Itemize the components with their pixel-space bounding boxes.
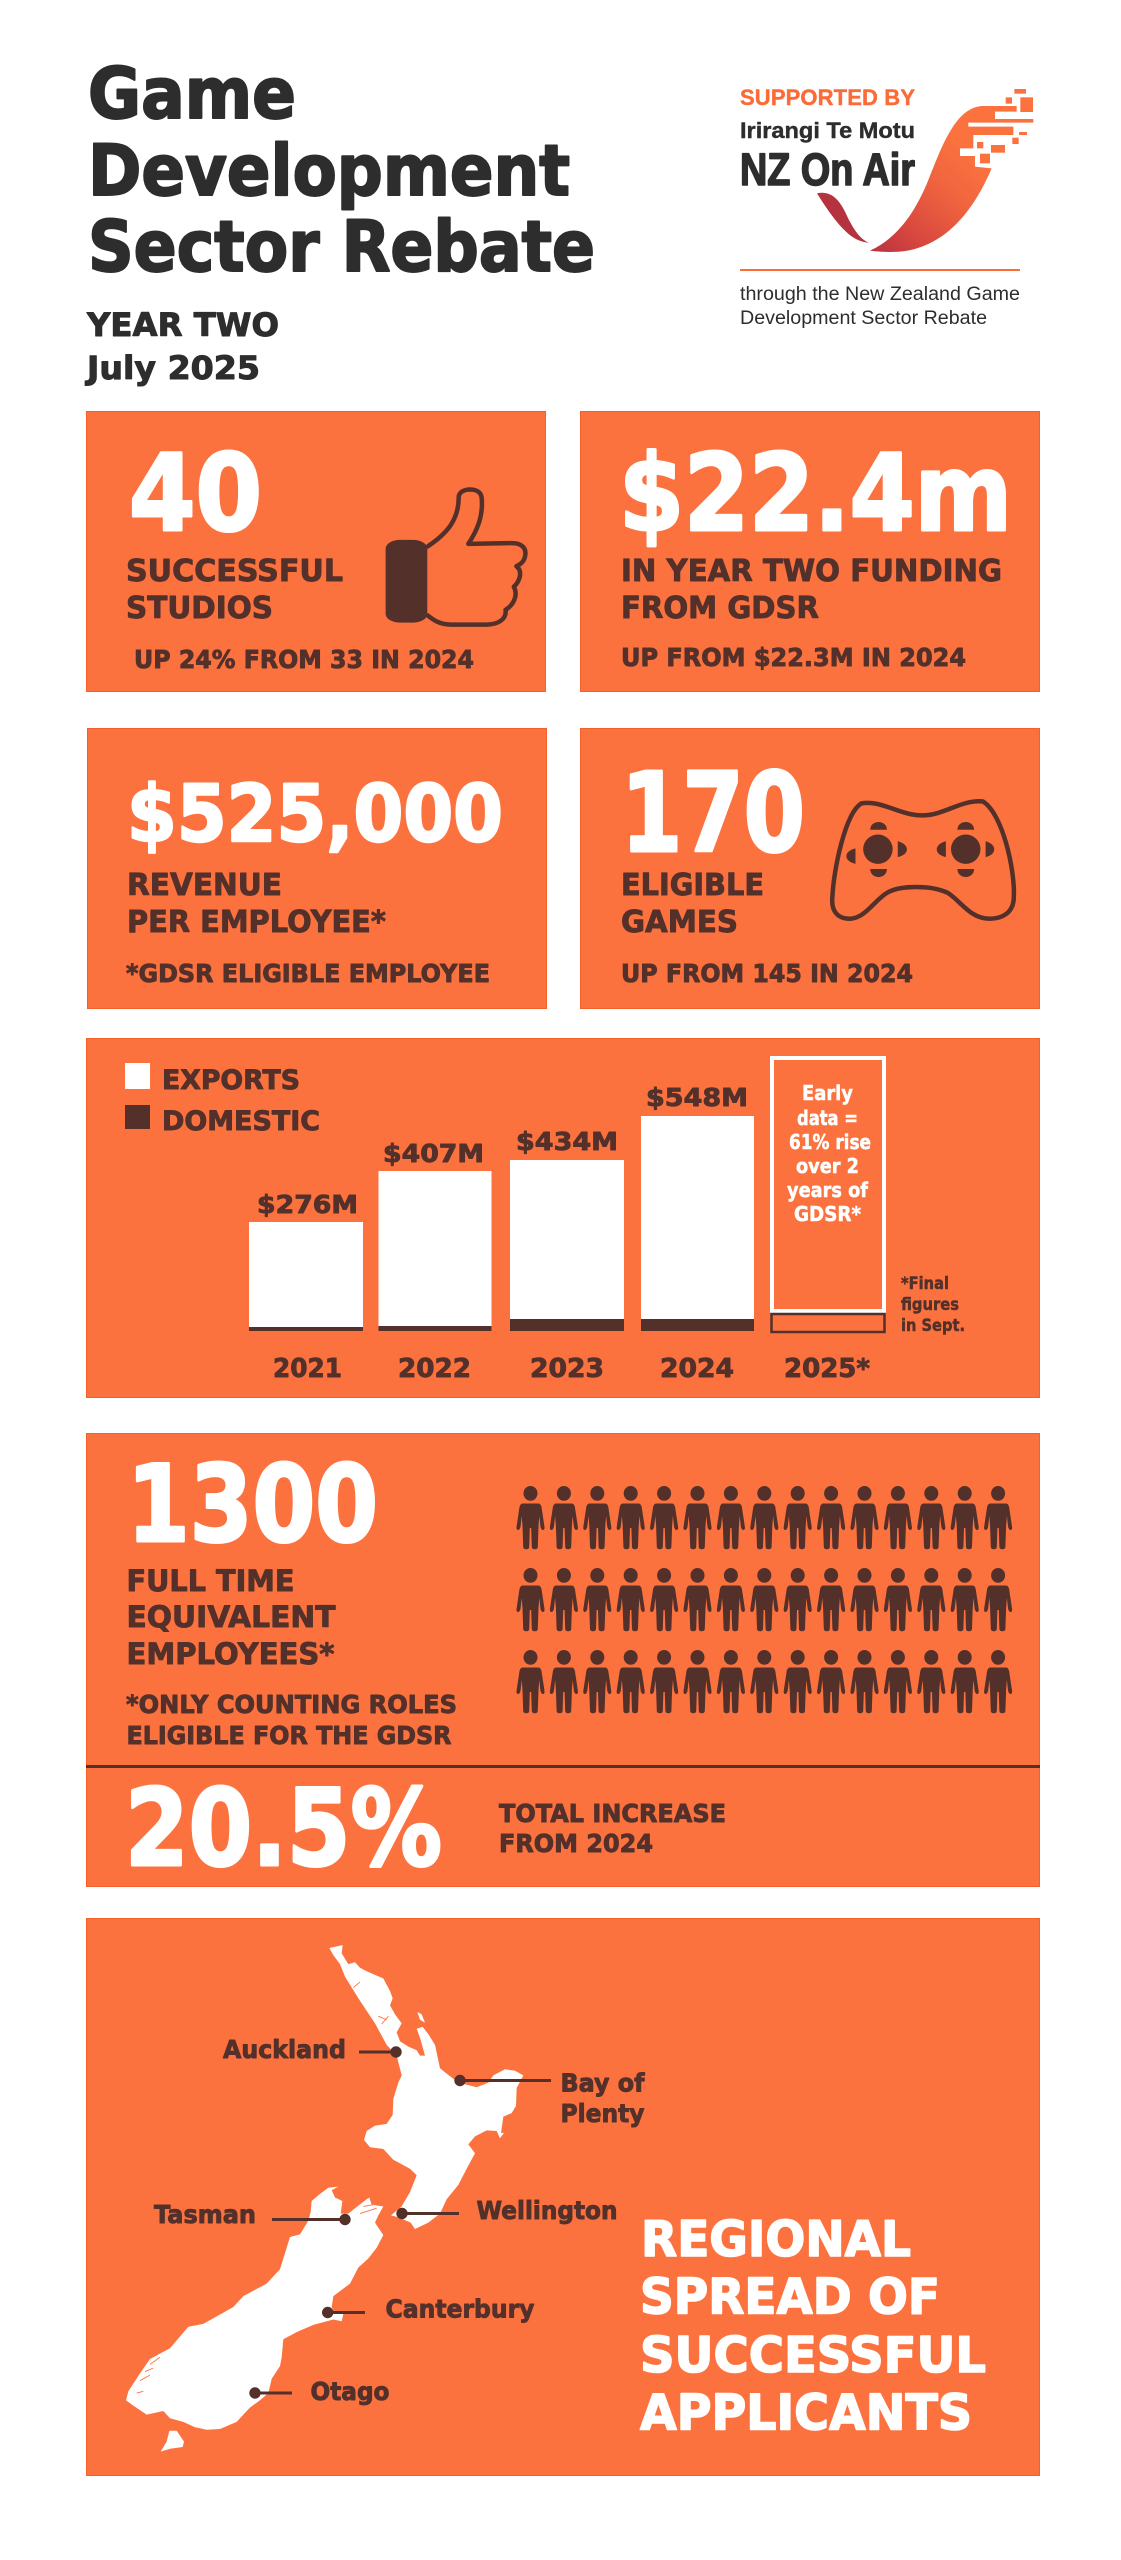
legend: EXPORTS <box>162 1065 300 1096</box>
note: only counting eligible roles: ELIGIBLE FOR THE GDSR <box>126 1721 452 1750</box>
note: up from 145: UP FROM 145 IN 2024 <box>621 959 913 988</box>
map marker: Wellington <box>396 2196 618 2225</box>
heading: regional spread of successful applicants: SUCCESSFUL <box>640 2327 986 2384</box>
map marker: Bay of Plenty <box>454 2068 646 2128</box>
note: up 24%: UP 24% FROM 33 IN 2024 <box>134 645 474 674</box>
axis years <box>273 1354 870 1384</box>
panel: employees <box>86 1434 1040 1890</box>
stat: 40: 40 <box>129 432 262 555</box>
footnote: final figures: figures <box>901 1295 959 1315</box>
stat: $525,000: $525,000 <box>127 770 503 860</box>
bar 2022 <box>378 1139 492 1331</box>
axis years: 2023 <box>530 1354 604 1384</box>
map marker: Canterbury: Canterbury <box>386 2294 534 2324</box>
stat: 1300: 1300 <box>127 1443 378 1566</box>
heading: regional spread of successful applicants: REGIONAL <box>641 2211 911 2268</box>
label: revenue per employee: REVENUE <box>127 868 282 903</box>
map marker: Bay of Plenty: Plenty <box>560 2099 644 2128</box>
NZ On Air wordmark: NZ On Air <box>740 144 915 195</box>
label: full time equivalent employees: EQUIVALENT <box>126 1600 336 1634</box>
heading: regional spread of successful applicants: APPLICANTS <box>640 2384 972 2442</box>
map marker: Tasman <box>154 2200 351 2229</box>
panel: revenue bar chart <box>86 1038 1040 1398</box>
bar 2022: $407M <box>383 1139 484 1168</box>
note: up from $22.3m: UP FROM $22.3M IN 2024 <box>621 643 966 672</box>
early data note: years of <box>787 1178 868 1202</box>
map marker: Otago <box>249 2377 390 2406</box>
label: eligible games <box>621 868 764 940</box>
heading: regional spread of successful applicants <box>640 2211 986 2442</box>
icon: NZ On Air tick swoosh <box>817 89 1033 252</box>
bar 2024 <box>641 1083 754 1331</box>
title: Game <box>88 53 296 135</box>
label: full time equivalent employees: EMPLOYEES* <box>126 1637 334 1671</box>
label: successful studios <box>126 554 343 626</box>
stat: 170: 170 <box>621 749 805 877</box>
logo divider line <box>740 269 1020 271</box>
title: Development <box>88 130 570 212</box>
note: only counting eligible roles <box>126 1690 457 1750</box>
subtitle: year and date <box>85 306 279 387</box>
map marker: Auckland: Auckland <box>223 2035 346 2064</box>
map marker: Bay of Plenty: Bay of <box>560 2068 646 2098</box>
label: successful studios: SUCCESSFUL <box>126 554 343 589</box>
heading: regional spread of successful applicants: SPREAD OF <box>640 2268 940 2326</box>
panel: revenue per employee <box>88 728 546 1008</box>
footnote: final figures: in Sept. <box>901 1316 965 1336</box>
panel: successful studios <box>86 412 546 692</box>
early data note: data = <box>797 1106 858 1130</box>
label: revenue per employee <box>127 868 386 940</box>
bar 2024: $548M <box>646 1083 748 1112</box>
panel: eligible games <box>580 728 1040 1008</box>
label: funding: FROM GDSR <box>621 591 819 626</box>
icon: rows of people <box>516 1486 1012 1713</box>
label: revenue per employee: PER EMPLOYEE* <box>127 905 386 940</box>
footnote: final figures: *Final <box>901 1274 949 1294</box>
axis years: 2025* <box>784 1354 870 1384</box>
axis years: 2024 <box>660 1354 734 1384</box>
label: successful studios: STUDIOS <box>126 591 273 626</box>
logo: supported by NZ On Air <box>740 85 1033 329</box>
bar 2025 early data <box>772 1058 884 1332</box>
label: funding <box>621 554 1002 626</box>
early data note: Early <box>802 1081 853 1105</box>
note: GDSR eligible employee: *GDSR ELIGIBLE EMPLOYEE <box>126 959 490 988</box>
early data note <box>787 1081 871 1226</box>
map marker: Canterbury <box>322 2294 534 2324</box>
Irirangi Te Motu wordmark: Irirangi Te Motu <box>740 118 915 143</box>
icon: thumbs up <box>386 489 525 625</box>
map of New Zealand <box>126 1945 523 2452</box>
subtitle: year and date: July 2025 <box>85 349 260 387</box>
label: eligible games: ELIGIBLE <box>621 868 764 903</box>
bar 2021 <box>249 1190 363 1331</box>
label: funding: IN YEAR TWO FUNDING <box>621 554 1002 589</box>
logo caption: Development Sector Rebate <box>740 308 987 329</box>
logo caption: through the New Zealand Game <box>740 284 1020 305</box>
panel: year two funding <box>580 412 1040 692</box>
stat: $22.4m: $22.4m <box>619 432 1012 555</box>
label: total increase: FROM 2024 <box>499 1829 653 1858</box>
early data note: 61% rise <box>789 1130 871 1154</box>
label: full time equivalent employees: FULL TIME <box>126 1564 294 1598</box>
supported by label: SUPPORTED BY <box>740 85 915 110</box>
bar 2023: $434M <box>516 1127 618 1156</box>
early data note: GDSR* <box>794 1202 861 1226</box>
panel: regional spread map <box>86 1918 1040 2476</box>
axis years: 2022 <box>398 1354 471 1384</box>
subtitle: year and date: YEAR TWO <box>86 306 279 344</box>
bar 2021: $276M <box>257 1190 358 1219</box>
title <box>88 53 595 288</box>
note: only counting eligible roles: *ONLY COUNTING ROLES <box>126 1690 457 1719</box>
logo caption <box>740 284 1020 329</box>
label: total increase <box>499 1799 726 1858</box>
legend: DOMESTIC <box>162 1106 320 1137</box>
label: eligible games: GAMES <box>621 905 738 940</box>
axis years: 2021 <box>273 1354 342 1384</box>
map marker: Otago: Otago <box>310 2377 390 2406</box>
legend <box>125 1063 320 1137</box>
map marker: Wellington: Wellington <box>476 2196 618 2225</box>
bar 2023 <box>510 1127 624 1331</box>
label: total increase: TOTAL INCREASE <box>499 1799 726 1828</box>
early data note: over 2 <box>796 1154 859 1178</box>
label: full time equivalent employees <box>126 1564 336 1671</box>
icon: game controller <box>832 801 1014 919</box>
title: Sector Rebate <box>88 206 595 288</box>
stat: 20.5%: 20.5% <box>125 1767 442 1890</box>
footnote: final figures <box>901 1274 965 1336</box>
map marker: Tasman: Tasman <box>154 2200 256 2229</box>
